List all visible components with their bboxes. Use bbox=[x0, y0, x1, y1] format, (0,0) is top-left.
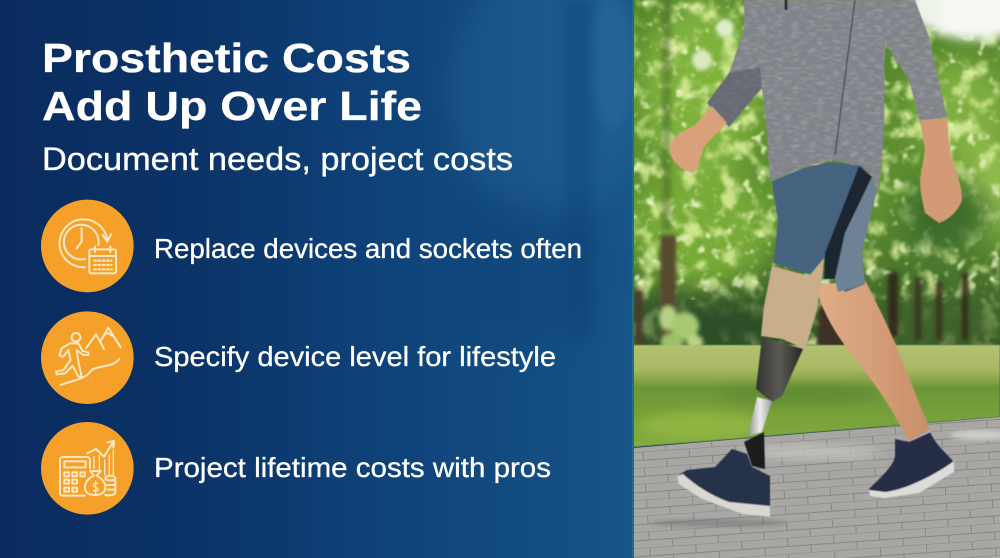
item: device level bbox=[41, 311, 556, 404]
item: replace devices bbox=[41, 200, 582, 292]
icon: clock and calendar bbox=[41, 200, 134, 292]
title bbox=[42, 35, 422, 129]
title: Prosthetic Costs bbox=[42, 35, 411, 81]
man: shirt bbox=[700, 0, 950, 195]
item text: Specify device level for lifestyle bbox=[154, 341, 556, 372]
prosthetic: beige knee sleeve bbox=[761, 258, 824, 349]
man: right leg and sneaker bbox=[815, 280, 954, 498]
icon: calculator, money bag, growth chart bbox=[41, 422, 134, 515]
man: arms and hands bbox=[670, 106, 962, 223]
item text: Replace devices and sockets often bbox=[154, 233, 582, 264]
photo: amputee walking in park bbox=[630, 0, 1000, 558]
prosthetic: socket and pylon bbox=[744, 337, 803, 469]
edge line between panel and photo bbox=[632, 0, 634, 558]
photo background: grass bbox=[633, 345, 1000, 447]
item: lifetime costs bbox=[41, 422, 551, 515]
panel: blue text background bbox=[0, 0, 650, 558]
item text: Project lifetime costs with pros bbox=[154, 452, 551, 483]
subtitle: Document needs, project costs bbox=[42, 141, 513, 177]
man: shorts bbox=[772, 162, 877, 292]
icon: runner and mountains bbox=[41, 311, 134, 404]
photo background: trees bbox=[630, 0, 1000, 364]
photo background: paved path bbox=[633, 417, 1000, 558]
man: left sneaker bbox=[677, 449, 770, 517]
title: Add Up Over Life bbox=[42, 83, 422, 129]
